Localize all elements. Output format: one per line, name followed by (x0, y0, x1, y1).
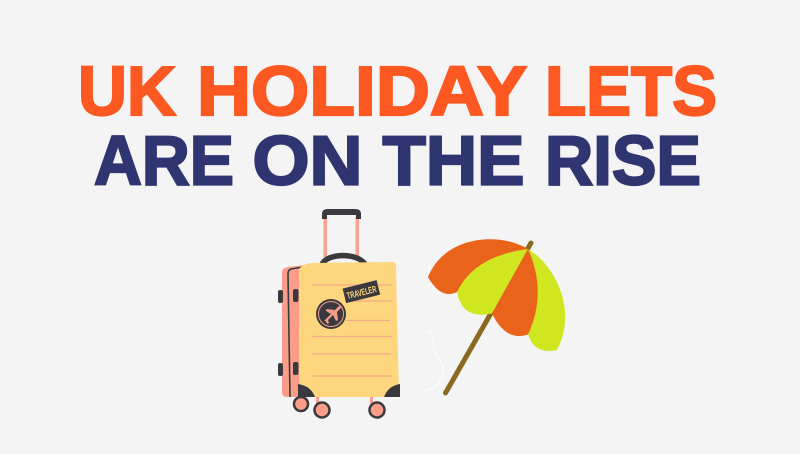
corner guards (298, 384, 400, 397)
sticker: plane badge (316, 299, 346, 329)
title line 2 (94, 122, 701, 200)
title line 2: RISE (545, 122, 701, 200)
title line 1 (78, 52, 717, 130)
sticker: traveler label: TRAVELER (346, 284, 378, 302)
title line 2: ON (252, 122, 362, 200)
carry handle arc (322, 256, 365, 264)
umbrella pole (446, 243, 531, 393)
centre-left green panel (457, 249, 528, 315)
title line 1: HOLIDAY (197, 52, 527, 130)
title line 1: LETS (545, 52, 717, 130)
back shell (282, 265, 305, 397)
faint white squiggle (424, 331, 443, 391)
side clips (278, 289, 298, 376)
handle poles (324, 217, 359, 257)
sticker: traveler label (343, 280, 380, 303)
back shell seam (288, 267, 303, 397)
title (78, 52, 717, 200)
title line 2: THE (382, 122, 524, 200)
front shell (299, 262, 399, 397)
title line 2: ARE (94, 122, 234, 200)
wheels (294, 396, 384, 418)
title line 1: UK (78, 52, 176, 130)
shell ribs (312, 285, 392, 376)
centre orange panel (492, 249, 538, 336)
icon: suitcase (278, 209, 400, 418)
icon: beach umbrella (424, 239, 565, 393)
handle grip (322, 209, 361, 219)
left orange panel (428, 239, 528, 294)
right green panel (528, 249, 565, 351)
